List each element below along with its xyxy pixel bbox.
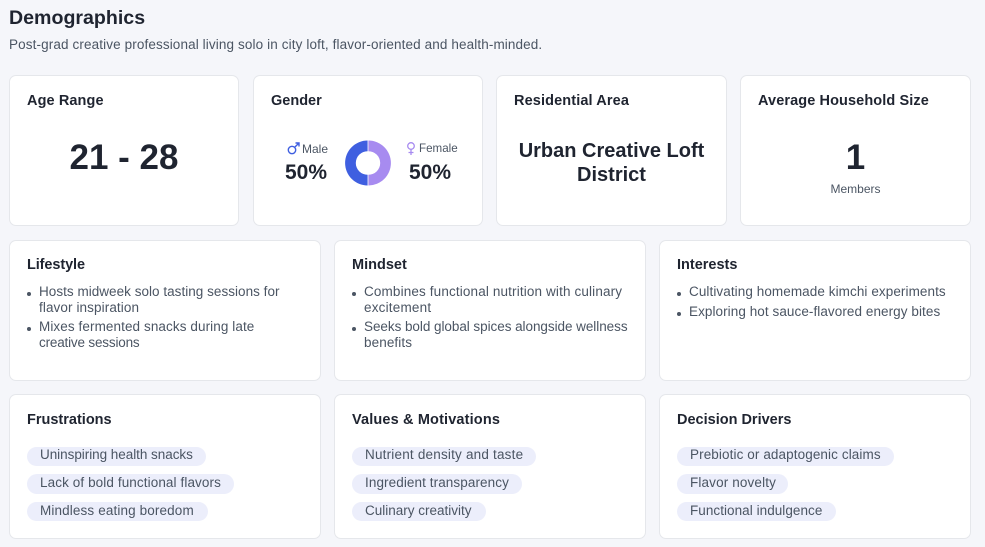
members caption: Members [830,182,880,196]
interests list: Exploring hot sauce-flavored energy bites [689,304,940,319]
tag: Ingredient transparency [365,475,509,490]
tag: Prebiotic or adaptogenic claims [690,447,881,462]
tag [677,502,836,521]
heading: lifestyle: Lifestyle [27,257,85,273]
lifestyle list [27,284,280,350]
donut chart [345,140,391,186]
panel: household size [740,75,971,226]
panel: mindset [334,240,646,381]
lifestyle list: Hosts midweek solo tasting sessions for [39,284,280,299]
mindset list: Seeks bold global spices alongside wellness [364,319,628,334]
heading: residential area: Residential Area [514,93,629,109]
heading: age range: Age Range [27,93,104,109]
panel: lifestyle [9,240,321,381]
tag: Mindless eating boredom [40,503,194,518]
tag [27,447,206,466]
mindset list [352,284,628,350]
tag: Culinary creativity [365,503,472,518]
household value: 1 [846,138,865,177]
panel: values and motivations [334,394,646,539]
panel: age range [9,75,239,226]
title: Demographics [9,7,145,29]
heading: interests: Interests [677,257,737,273]
residential value: District [577,164,646,186]
mindset list: excitement [364,300,431,315]
tag: Flavor novelty [690,475,776,490]
lifestyle list: flavor inspiration [39,300,139,315]
female text: Female [419,142,458,155]
male label [285,142,328,184]
lifestyle list: creative sessions [39,335,139,350]
female percent: 50% [409,161,451,184]
age value: 21 - 28 [70,138,178,177]
tag [352,474,522,494]
residential value: Urban Creative Loft [519,140,704,162]
male text: Male [302,142,328,156]
lifestyle list: Mixes fermented snacks during late [39,319,254,334]
heading: gender: Gender [271,93,322,109]
mindset list: Combines functional nutrition with culinary [364,284,622,299]
icon: male symbol [288,142,300,154]
male percent: 50% [285,161,327,184]
mindset list: benefits [364,335,412,350]
tag: Lack of bold functional flavors [40,475,221,490]
heading: household size: Average Household Size [758,93,929,109]
panel: decision drivers [659,394,971,539]
tag [352,447,536,466]
interests list [677,284,946,319]
tag [352,502,486,521]
heading: values and motivations: Values & Motivations [352,412,500,428]
tag [27,474,234,494]
heading: frustrations: Frustrations [27,412,112,428]
heading: mindset: Mindset [352,257,407,273]
panel: frustrations [9,394,321,539]
panel: gender [253,75,483,226]
heading: decision drivers: Decision Drivers [677,412,791,428]
tag [27,502,208,521]
tag: Uninspiring health snacks [40,447,193,462]
tag: Functional indulgence [690,503,822,518]
interests list: Cultivating homemade kimchi experiments [689,284,946,299]
icon: female symbol [407,142,415,155]
panel: residential area [496,75,727,226]
tag [677,474,788,494]
female label [407,142,458,184]
panel: interests [659,240,971,381]
tag: Nutrient density and taste [365,447,523,462]
residential value [519,140,704,186]
subtitle: Post-grad creative professional living solo in city loft, flavor-oriented and health-minded. [9,37,542,52]
tag [677,447,894,466]
